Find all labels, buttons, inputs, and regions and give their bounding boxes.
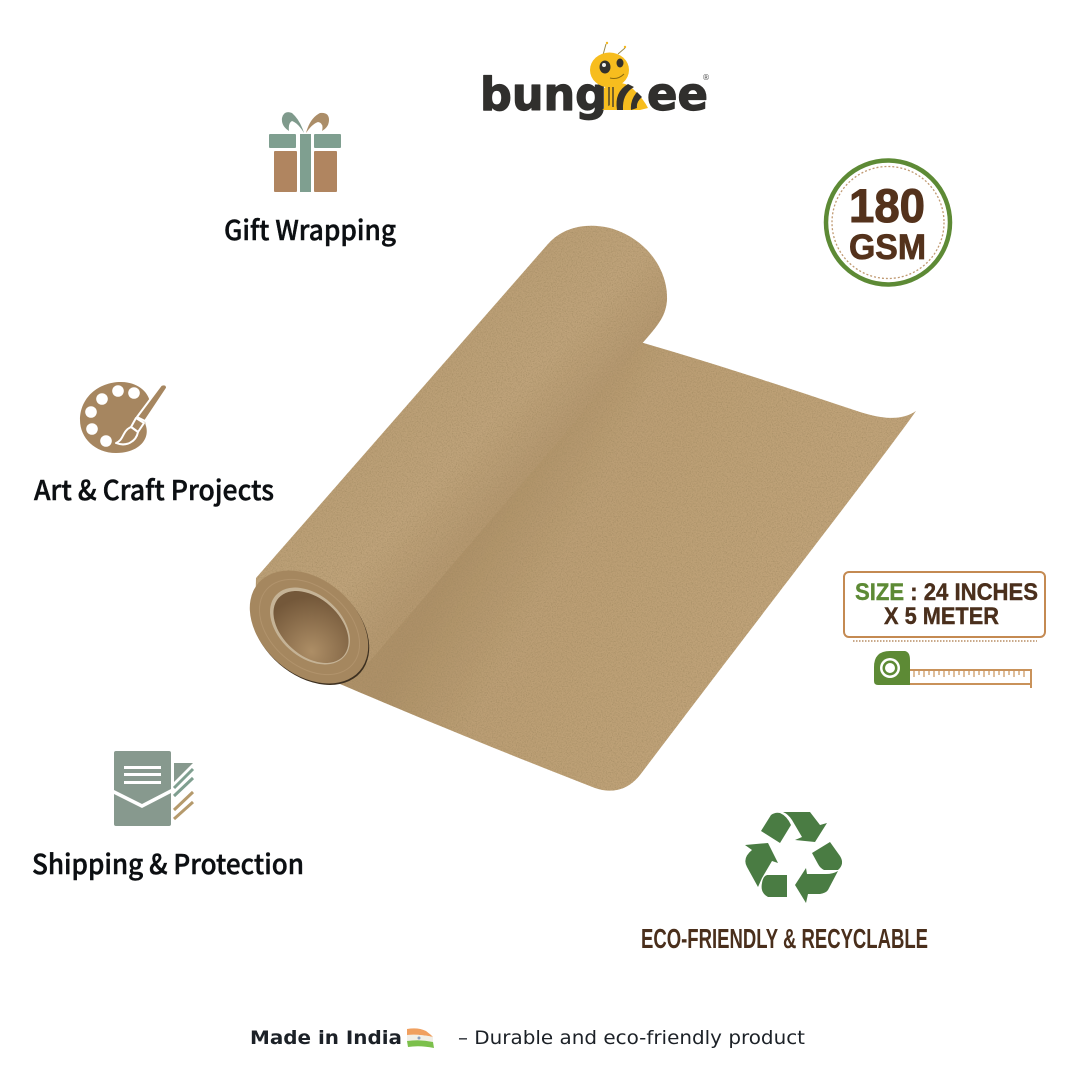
- icon: recycle symbol: [745, 812, 842, 903]
- roll end face: [228, 548, 391, 708]
- heading: art and craft projects: Art & Craft Projects: [34, 469, 274, 508]
- logo registered mark: ®: [702, 73, 710, 82]
- badge unit: GSM: [849, 228, 926, 267]
- icon: paint palette: [80, 382, 167, 453]
- heading: shipping and protection: Shipping & Protection: [32, 843, 304, 882]
- icon: gift box: [269, 112, 341, 192]
- product: kraft paper roll: [228, 226, 916, 791]
- icon: indian flag: [407, 1028, 434, 1048]
- footer bold text: Made in India: [250, 1027, 402, 1049]
- logo bee mascot: [590, 42, 648, 110]
- badge value: 180: [849, 179, 925, 232]
- roll core hole: [260, 577, 362, 677]
- badge: 180 GSM: [826, 160, 950, 284]
- size text line one: SIZE : 24 INCHES: [855, 579, 1038, 606]
- footer: made in india: [250, 1027, 805, 1049]
- heading: eco-friendly and recyclable: ECO-FRIENDLY & RECYCLABLE: [641, 923, 928, 954]
- roll core outer: [255, 572, 365, 680]
- brush: [116, 384, 167, 444]
- heading: gift wrapping: Gift Wrapping: [224, 209, 396, 248]
- logo wordmark right: ee: [647, 68, 708, 121]
- icon: measuring tape: [874, 651, 1031, 688]
- roll body: [255, 226, 667, 680]
- footer regular text: – Durable and eco-friendly product: [458, 1027, 805, 1049]
- size text line two: X 5 METER: [884, 603, 999, 630]
- logo: bungbee: [480, 42, 710, 121]
- paper sheet: [340, 342, 916, 791]
- callout: size: [844, 572, 1045, 688]
- logo wordmark left: bung: [480, 68, 607, 121]
- icon: envelope and documents: [114, 751, 193, 826]
